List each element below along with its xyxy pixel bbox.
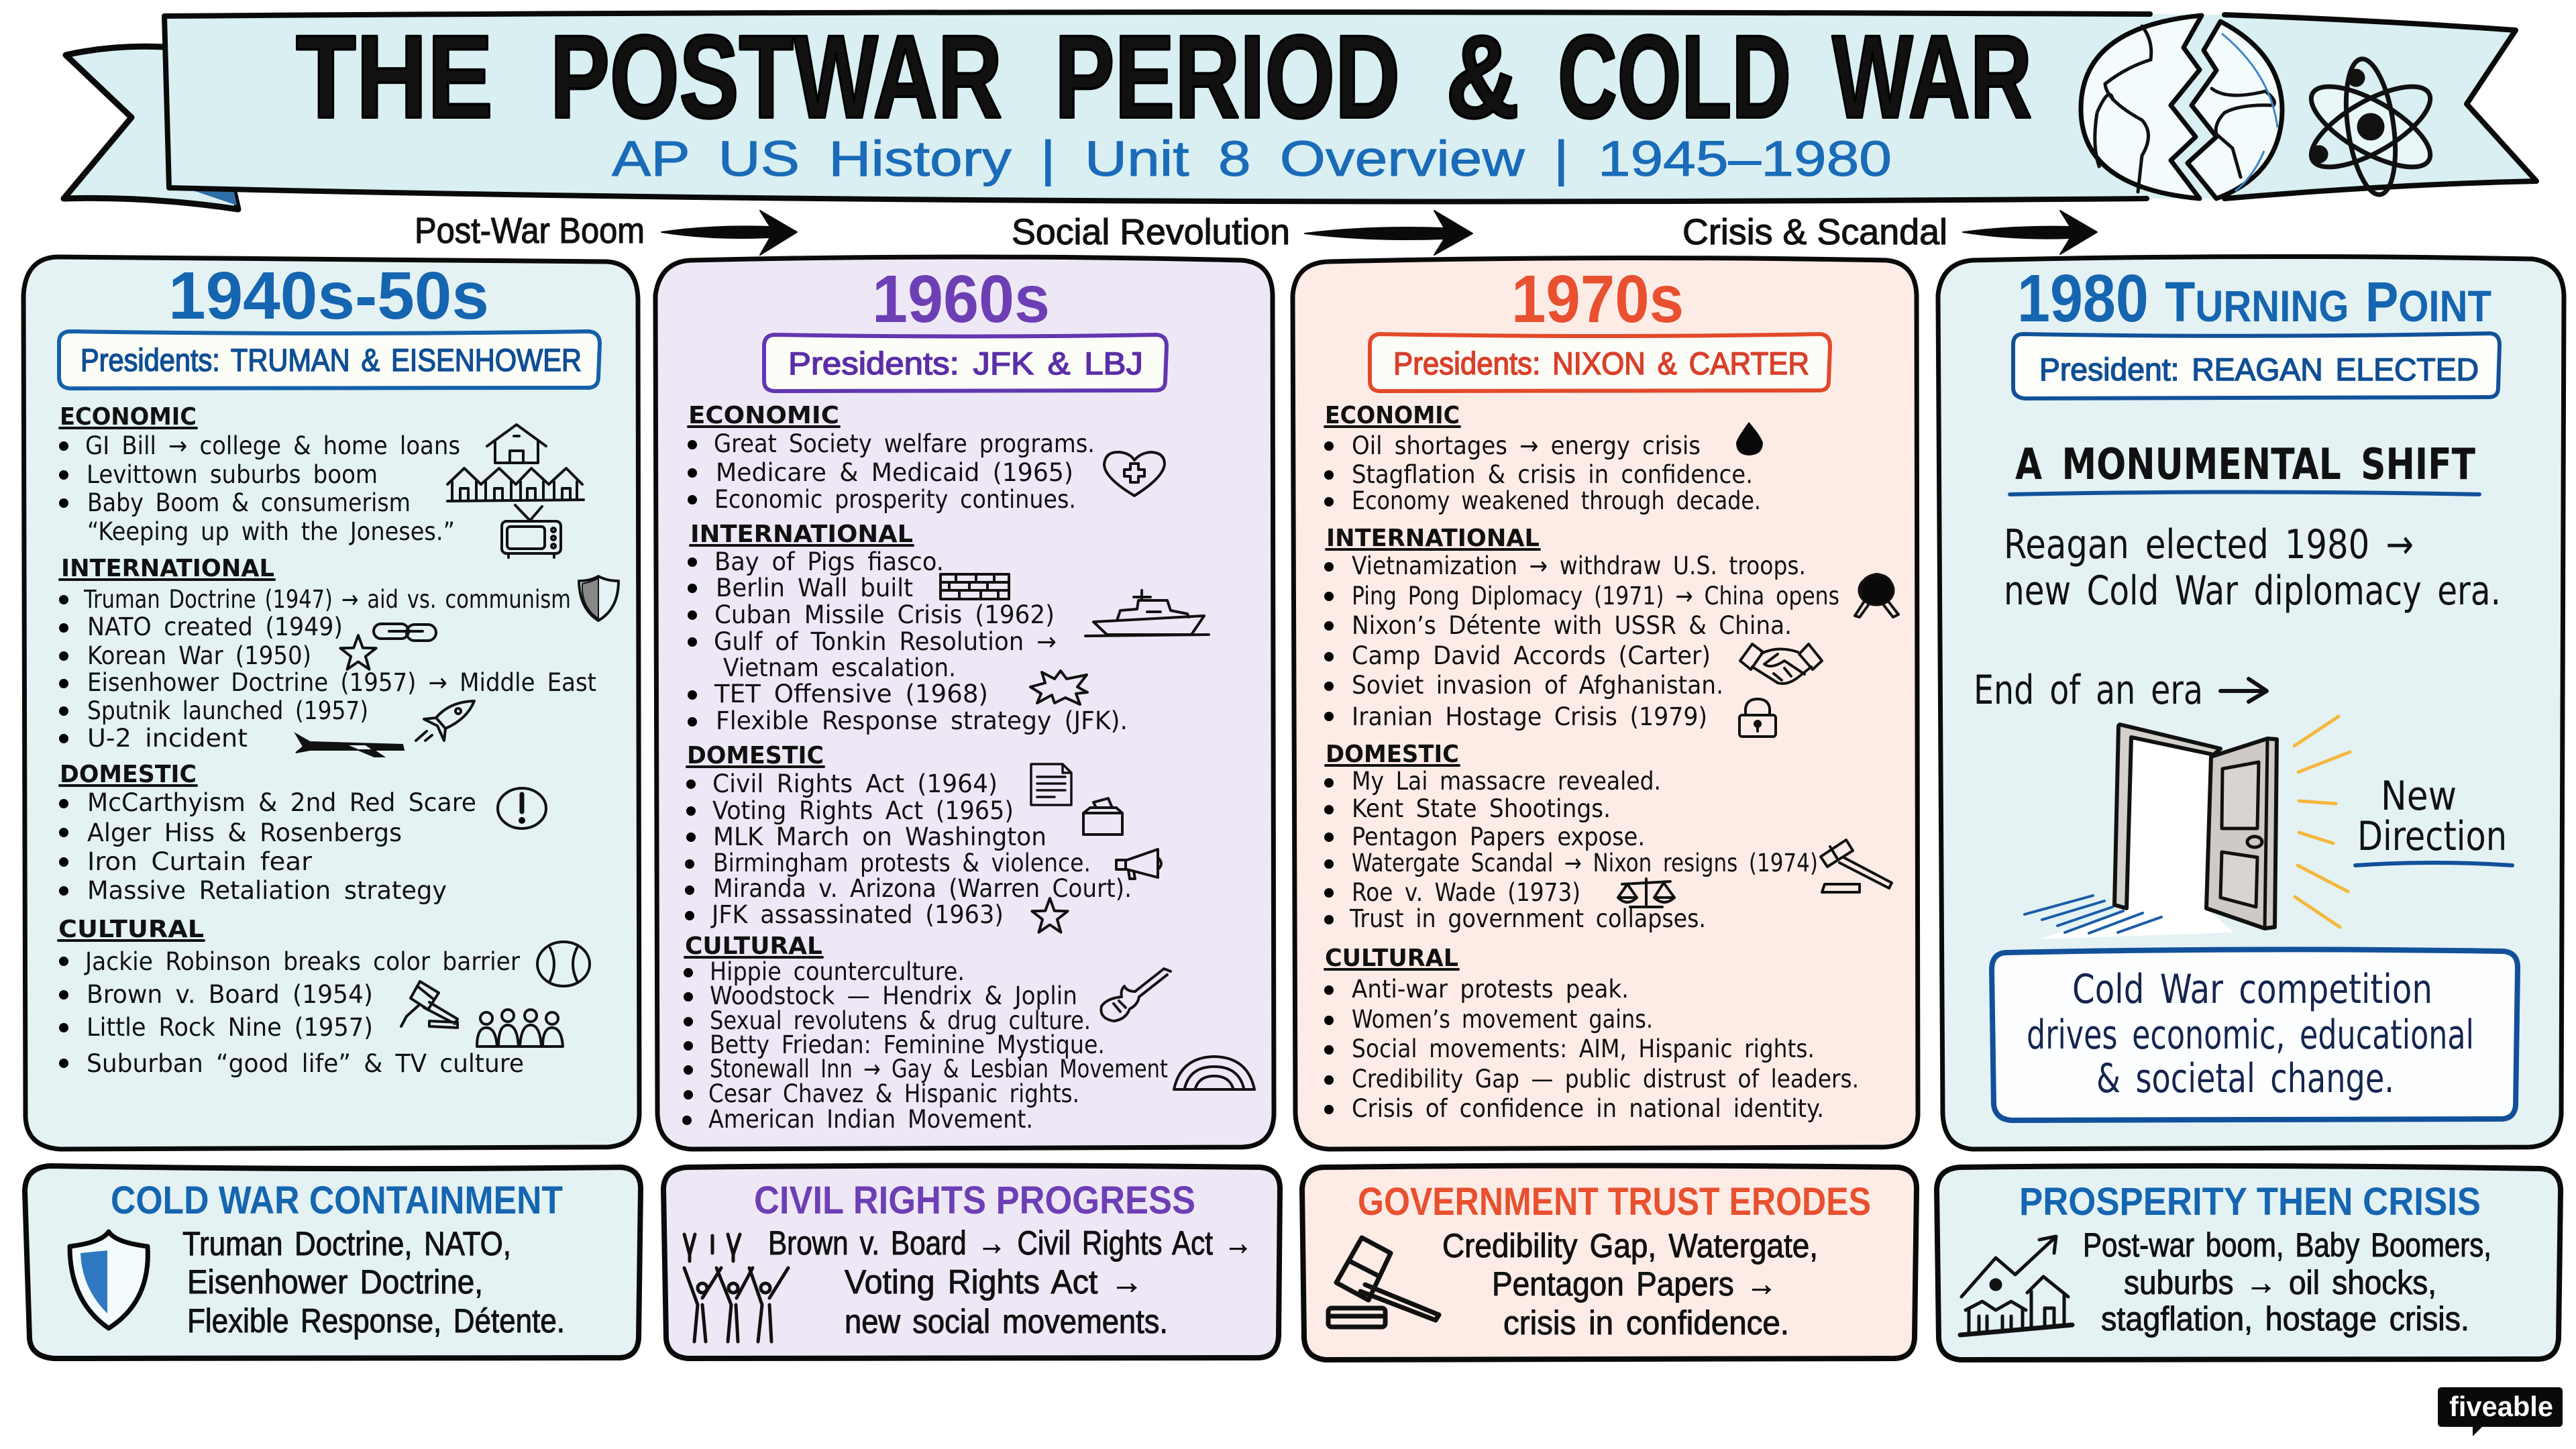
heading: 1940s-50s: 1940s-50s	[168, 258, 489, 333]
international bullets: Iranian Hostage Crisis (1979)	[1352, 702, 1707, 731]
economic bullets: Great Society welfare programs.	[714, 429, 1095, 458]
section heading: domestic: DOMESTIC	[687, 742, 824, 769]
section heading: international: INTERNATIONAL	[690, 521, 913, 548]
cultural bullets: Jackie Robinson breaks color barrier	[84, 947, 521, 976]
text: Voting Rights Act →	[845, 1263, 1143, 1301]
economic bullets: Economy weakened through decade.	[1352, 486, 1761, 515]
heading: 1980 turning point: 1980 TURNING POINT	[2017, 261, 2491, 336]
cultural bullets: American Indian Movement.	[708, 1105, 1033, 1134]
economic bullets: “Keeping up with the Joneses.”	[87, 517, 455, 546]
main title: POSTWAR	[550, 11, 1002, 143]
text: Eisenhower Doctrine,	[187, 1263, 483, 1301]
timeline label: post-war boom	[415, 211, 797, 255]
logo: fiveable: fiveable	[2449, 1391, 2553, 1422]
icon: rocket	[416, 701, 474, 741]
text	[182, 1225, 565, 1340]
main title: THE	[296, 11, 493, 143]
section heading: domestic: DOMESTIC	[1326, 741, 1459, 768]
heading: 1970s: 1970s	[1511, 262, 1684, 337]
presidents box	[1370, 334, 1830, 391]
international bullets: Gulf of Tonkin Resolution →	[714, 627, 1057, 656]
presidents box	[59, 331, 600, 388]
icon: star	[1032, 898, 1068, 932]
economic bullets	[59, 431, 460, 546]
icon: shield	[70, 1232, 148, 1328]
icon: cracked globe	[2081, 15, 2282, 199]
economic bullets: Oil shortages → energy crisis	[1352, 431, 1701, 460]
icon: shield	[579, 576, 619, 621]
presidents box	[764, 335, 1167, 391]
section heading: international: INTERNATIONAL	[1326, 525, 1540, 552]
text: new direction	[2355, 773, 2512, 865]
text	[768, 1224, 1252, 1340]
title: COLD WAR CONTAINMENT	[111, 1179, 563, 1222]
main title: COLD	[1558, 11, 1791, 143]
panel: 1980 turning point	[1938, 256, 2564, 1149]
icon: heart with cross	[1104, 452, 1165, 496]
icon: guitar	[1101, 969, 1171, 1021]
text: Truman Doctrine, NATO,	[182, 1225, 511, 1263]
text: new direction: New	[2381, 773, 2457, 820]
icon: document	[1031, 764, 1071, 805]
international bullets: Korean War (1950)	[87, 641, 311, 670]
banner ribbon shape	[64, 12, 2536, 209]
domestic bullets: My Lai massacre revealed.	[1352, 767, 1661, 796]
panel: 1960s	[655, 257, 1274, 1149]
section heading: cultural: CULTURAL	[685, 932, 822, 960]
domestic bullets	[1324, 767, 1818, 933]
text: new social movements.	[845, 1303, 1168, 1340]
cultural bullets: Cesar Chavez & Hispanic rights.	[708, 1079, 1079, 1108]
timeline label: social revolution: Social Revolution	[1012, 212, 1290, 252]
international bullets: NATO created (1949)	[87, 612, 343, 641]
panel background	[1293, 258, 1918, 1149]
economic bullets: Economic prosperity continues.	[714, 485, 1076, 514]
section heading: economic: ECONOMIC	[1325, 402, 1460, 429]
title: GOVERNMENT TRUST ERODES	[1358, 1180, 1871, 1224]
international bullets: Berlin Wall built	[716, 574, 913, 602]
cultural bullets: Hippie counterculture.	[710, 957, 965, 986]
bottom panel: cold war containment	[25, 1166, 641, 1358]
icon: suburb with rising arrow	[1960, 1236, 2072, 1335]
bottom panel: civil rights progress	[663, 1166, 1280, 1358]
domestic bullets: Voting Rights Act (1965)	[712, 796, 1014, 825]
icon: gavel	[1328, 1238, 1439, 1327]
text	[1442, 1227, 1818, 1342]
international bullets: Truman Doctrine (1947) → aid vs. communism	[83, 585, 571, 614]
cultural bullets: Credibility Gap — public distrust of leaders.	[1352, 1065, 1859, 1093]
domestic bullets: MLK March on Washington	[713, 822, 1046, 851]
timeline label: social revolution	[1012, 211, 1472, 255]
icon: ballot box	[1083, 798, 1122, 835]
cultural bullets	[682, 957, 1168, 1134]
arrow	[1963, 211, 2097, 254]
title: PROSPERITY THEN CRISIS	[2019, 1180, 2481, 1224]
heading: a monumental shift: A MONUMENTAL SHIFT	[2015, 440, 2475, 490]
text: end of an era with arrow: End of an era	[1974, 667, 2203, 714]
domestic bullets: Civil Rights Act (1964)	[712, 769, 998, 798]
cultural bullets: Suburban “good life” & TV culture	[87, 1049, 524, 1078]
cultural bullets: Stonewall Inn → Gay & Lesbian Movement	[710, 1055, 1168, 1083]
icon: atom	[2300, 56, 2442, 198]
cultural bullets: Social movements: AIM, Hispanic rights.	[1352, 1034, 1815, 1063]
icon: navy ship	[1085, 590, 1209, 636]
icon: gavel	[401, 981, 458, 1028]
domestic bullets: Birmingham protests & violence.	[713, 849, 1091, 877]
text: crisis in confidence.	[1503, 1304, 1789, 1342]
arrow	[661, 211, 797, 255]
text: new direction: Direction	[2357, 813, 2507, 860]
icon: open door with light	[2025, 716, 2350, 939]
icon: raised-hand crowd	[684, 1234, 788, 1342]
callout: cold war competition: Cold War competition	[2072, 966, 2432, 1013]
icon: television	[502, 505, 561, 557]
text: Credibility Gap, Watergate,	[1442, 1227, 1818, 1265]
panel background	[663, 1166, 1280, 1358]
international bullets: Bay of Pigs fiasco.	[714, 547, 944, 576]
economic bullets: Medicare & Medicaid (1965)	[716, 458, 1073, 487]
icon: scales of justice	[1618, 879, 1674, 907]
section heading: cultural: CULTURAL	[58, 916, 204, 943]
main title: &	[1446, 11, 1519, 143]
cultural bullets: Crisis of confidence in national identity.	[1352, 1094, 1824, 1123]
economic bullets	[1324, 431, 1761, 515]
text: Pentagon Papers →	[1492, 1265, 1777, 1303]
domestic bullets: Roe v. Wade (1973)	[1352, 878, 1580, 907]
international bullets: Eisenhower Doctrine (1957) → Middle East	[87, 668, 596, 697]
international bullets: Vietnam escalation.	[723, 653, 956, 682]
main title: PERIOD	[1055, 11, 1400, 143]
text: Flexible Response, Détente.	[187, 1302, 565, 1340]
text: suburbs → oil shocks,	[2124, 1264, 2436, 1301]
icon: U-2 plane	[296, 734, 404, 757]
text: reagan elected: Reagan elected 1980 →	[2004, 521, 2414, 568]
text: stagflation, hostage crisis.	[2101, 1300, 2469, 1338]
icon: handshake	[1740, 644, 1822, 684]
international bullets: Nixon’s Détente with USSR & China.	[1352, 611, 1792, 640]
main title	[296, 11, 2032, 143]
icon: ping pong paddles	[1855, 574, 1898, 617]
domestic bullets: Trust in government collapses.	[1349, 904, 1706, 933]
panel background	[655, 257, 1274, 1149]
panel background	[23, 257, 639, 1149]
domestic bullets: Alger Hiss & Rosenbergs	[87, 818, 402, 847]
icon: megaphone	[1116, 849, 1161, 879]
icon: berlin wall	[941, 574, 1009, 599]
icon: chain link	[374, 624, 436, 641]
icon: house	[487, 425, 546, 463]
subtitle: AP US History | Unit 8 Overview | 1945–1980	[612, 131, 1892, 186]
international bullets: Sputnik launched (1957)	[87, 696, 368, 725]
international bullets: U-2 incident	[87, 724, 248, 753]
economic bullets: Baby Boom & consumerism	[87, 488, 411, 517]
panel background	[1302, 1166, 1917, 1360]
bottom panel: government trust erodes	[1302, 1166, 1917, 1360]
timeline label: crisis and scandal	[1682, 211, 2097, 254]
callout: cold war competition	[1992, 949, 2518, 1120]
international bullets: Camp David Accords (Carter)	[1352, 641, 1711, 670]
international bullets	[688, 547, 1128, 735]
title banner	[64, 11, 2536, 209]
panel: 1940s-50s	[23, 257, 639, 1149]
economic bullets: GI Bill → college & home loans	[85, 431, 460, 460]
logo: fiveable	[2438, 1387, 2563, 1436]
text	[2083, 1226, 2491, 1338]
international bullets	[59, 585, 596, 753]
president box	[2013, 333, 2500, 398]
international bullets: Ping Pong Diplomacy (1971) → China opens	[1352, 582, 1839, 610]
international bullets	[1324, 551, 1839, 731]
international bullets: TET Offensive (1968)	[714, 680, 988, 708]
international bullets: Cuban Missile Crisis (1962)	[714, 600, 1055, 629]
icon: burst	[1030, 671, 1087, 704]
domestic bullets: JFK assassinated (1963)	[710, 900, 1004, 929]
panel: 1970s	[1293, 258, 1918, 1149]
international bullets: Vietnamization → withdraw U.S. troops.	[1352, 551, 1806, 580]
section heading: international: INTERNATIONAL	[61, 555, 274, 582]
icon: baseball	[537, 942, 590, 986]
economic bullets	[688, 429, 1095, 514]
section heading: economic: ECONOMIC	[688, 402, 839, 429]
section heading: domestic: DOMESTIC	[60, 761, 197, 788]
cultural bullets: Little Rock Nine (1957)	[87, 1013, 373, 1042]
domestic bullets	[59, 788, 476, 905]
cultural bullets: Betty Friedan: Feminine Mystique.	[710, 1030, 1105, 1059]
domestic bullets	[685, 769, 1132, 929]
timeline label: post-war boom: Post-War Boom	[415, 211, 645, 251]
domestic bullets: Pentagon Papers expose.	[1352, 822, 1645, 851]
panel background	[1937, 1166, 2561, 1360]
text: Brown v. Board → Civil Rights Act →	[768, 1224, 1252, 1262]
international bullets: Soviet invasion of Afghanistan.	[1352, 671, 1723, 700]
icon: exclamation	[498, 788, 546, 828]
economic bullets: Levittown suburbs boom	[87, 460, 378, 489]
icon: little rock nine people	[477, 1010, 563, 1046]
cultural bullets: Anti-war protests peak.	[1352, 975, 1629, 1004]
cultural bullets	[1324, 975, 1859, 1123]
domestic bullets: Watergate Scandal → Nixon resigns (1974)	[1352, 849, 1818, 877]
main title: WAR	[1832, 11, 2032, 143]
text: reagan elected	[2004, 521, 2501, 614]
cultural bullets: Sexual revolutens & drug culture.	[710, 1006, 1091, 1035]
president box: President: REAGAN ELECTED	[2039, 352, 2479, 387]
presidents box: Presidents: TRUMAN & EISENHOWER	[80, 342, 582, 378]
icon: suburb houses	[447, 468, 584, 501]
panel background	[25, 1166, 641, 1358]
icon: gavel	[1821, 840, 1892, 892]
domestic bullets: Miranda v. Arizona (Warren Court).	[713, 874, 1132, 903]
domestic bullets: McCarthyism & 2nd Red Scare	[87, 788, 476, 817]
heading: 1960s: 1960s	[872, 262, 1050, 337]
cultural bullets	[59, 947, 524, 1078]
icon: star	[340, 635, 376, 669]
presidents box: Presidents: JFK & LBJ	[788, 345, 1143, 381]
bottom panel: prosperity then crisis	[1937, 1166, 2561, 1360]
icon: padlock	[1739, 699, 1776, 737]
icon: oil drop	[1736, 422, 1763, 455]
domestic bullets: Massive Retaliation strategy	[87, 876, 447, 905]
title: CIVIL RIGHTS PROGRESS	[754, 1179, 1195, 1222]
economic bullets: Stagflation & crisis in confidence.	[1352, 460, 1753, 489]
arrow	[1305, 211, 1472, 255]
cultural bullets: Women’s movement gains.	[1352, 1005, 1653, 1034]
domestic bullets: Kent State Shootings.	[1352, 794, 1611, 823]
panel background	[1938, 256, 2564, 1149]
cultural bullets: Woodstock — Hendrix & Joplin	[710, 981, 1077, 1010]
text: Post-war boom, Baby Boomers,	[2083, 1226, 2491, 1264]
section heading: cultural: CULTURAL	[1325, 945, 1458, 972]
icon: rainbow	[1174, 1057, 1254, 1089]
callout: cold war competition: & societal change.	[2096, 1055, 2394, 1102]
timeline label: crisis and scandal: Crisis & Scandal	[1682, 212, 1947, 252]
presidents box: Presidents: NIXON & CARTER	[1393, 345, 1809, 381]
section heading: economic: ECONOMIC	[60, 403, 197, 431]
international bullets: Flexible Response strategy (JFK).	[716, 706, 1128, 735]
cultural bullets: Brown v. Board (1954)	[87, 980, 373, 1009]
domestic bullets: Iron Curtain fear	[87, 847, 313, 876]
